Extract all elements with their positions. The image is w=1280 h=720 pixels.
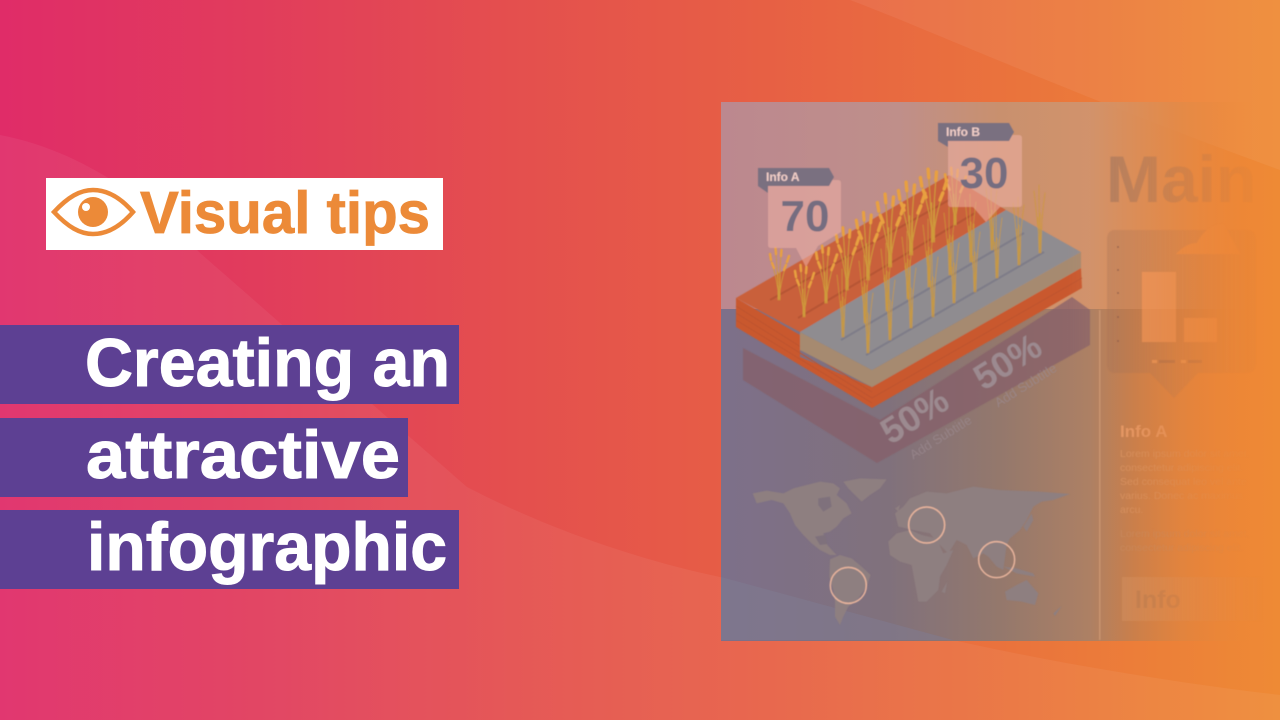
value 70: 70 — [781, 192, 829, 241]
percentage label: left: Add Subtitle — [907, 412, 974, 462]
chart card body — [1107, 230, 1202, 397]
badge: Visual tips — [46, 178, 443, 250]
percentage label: right: Add Subtitle — [992, 360, 1059, 410]
ribbon A — [758, 168, 834, 193]
panel wave tint — [721, 577, 953, 640]
callout: Info B — [938, 123, 1022, 222]
title — [0, 325, 459, 589]
info heading: Info A — [1120, 422, 1168, 441]
isometric shadow plate — [743, 297, 1090, 463]
grey field furrows — [841, 233, 1044, 355]
ribbon label A: Info A — [766, 170, 800, 184]
chart bar 2 — [1184, 318, 1210, 342]
percentage label: left: 50% — [873, 379, 956, 452]
grey slab side — [800, 252, 1081, 387]
info paragraph — [1120, 448, 1250, 516]
badge label: Visual tips — [140, 180, 430, 246]
map continents — [753, 478, 1070, 625]
soil strata — [800, 278, 1082, 378]
grey field plants — [837, 182, 1045, 353]
info button — [1122, 577, 1262, 621]
panel contents — [736, 123, 1262, 640]
info paragraph: arcu. — [1120, 504, 1143, 516]
panel background: upper — [721, 102, 1280, 309]
ribbon label B: Info B — [946, 125, 980, 139]
info paragraph: varius. Donec ac maximus — [1120, 490, 1243, 502]
chart legend — [1152, 360, 1202, 363]
icon: eye — [54, 190, 133, 234]
info text block — [1120, 425, 1197, 548]
info secondary paragraph: consectetur adipiscing elit. — [1120, 542, 1243, 554]
map bays — [815, 497, 832, 545]
cloud icon — [1177, 230, 1216, 254]
orange field surface — [736, 175, 1006, 332]
main heading: Main — [1106, 142, 1256, 216]
info paragraph: consectetur adipiscing elit. — [1120, 462, 1243, 474]
map location rings — [830, 507, 1015, 603]
chart bar 1 — [1142, 272, 1176, 342]
grey slab surface — [800, 210, 1081, 370]
ribbon B — [938, 123, 1014, 147]
orange field furrows — [770, 200, 975, 318]
percentage label: right — [972, 335, 1056, 408]
button label: Info — [1135, 586, 1181, 614]
title line 3: infographic — [87, 509, 447, 585]
callout card A — [768, 180, 841, 267]
chart card — [1107, 230, 1203, 397]
info paragraph: Sed consequat leo vel ante — [1120, 476, 1247, 488]
world map — [753, 478, 1070, 625]
faded infographic panel — [721, 102, 1280, 641]
title line 1: Creating an — [85, 325, 450, 401]
soil block front — [736, 268, 1082, 408]
field illustration — [736, 168, 1082, 408]
column divider — [1099, 310, 1100, 640]
button box — [1122, 577, 1262, 621]
callout card B — [948, 135, 1022, 222]
info secondary paragraph — [1120, 528, 1250, 554]
panel background: lower — [721, 309, 1280, 641]
callout: Info A — [758, 168, 841, 267]
percentage label: left — [880, 389, 972, 459]
percentage label: right: 50% — [966, 325, 1049, 398]
background wave: upper right — [850, 0, 1280, 170]
badge background — [46, 178, 443, 250]
chart axis points — [1117, 246, 1119, 342]
title line 2: attractive — [86, 417, 400, 493]
orange field plants — [770, 168, 966, 317]
info secondary paragraph: Lorem ipsum dolor sit amet, — [1120, 528, 1250, 540]
info paragraph: Lorem ipsum dolor sit amet, — [1120, 448, 1250, 460]
value 30: 30 — [960, 149, 1008, 198]
